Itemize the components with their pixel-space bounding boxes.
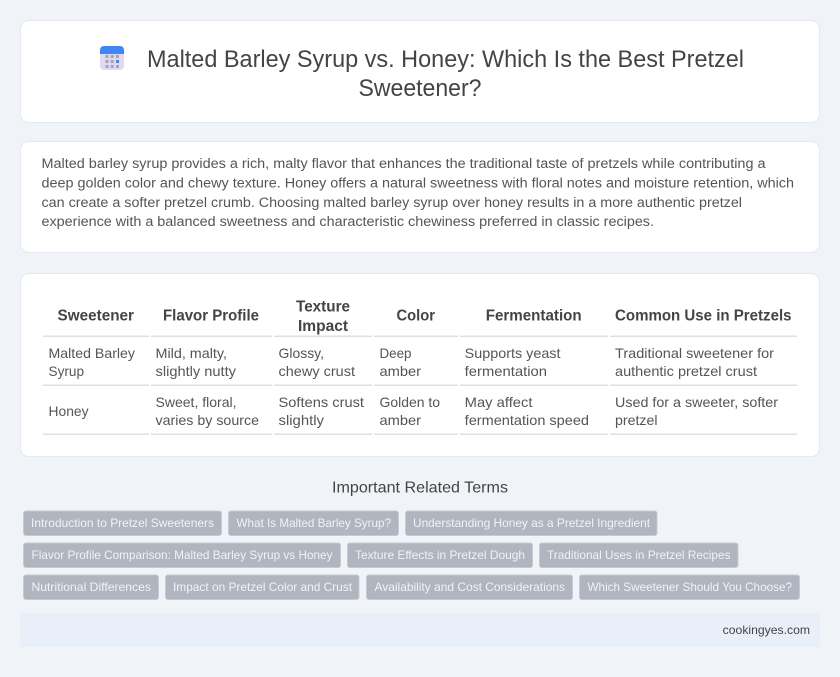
table row: honey: Softens crust bbox=[278, 394, 364, 410]
table header row: Common Use in Pretzels bbox=[615, 308, 792, 325]
table row: honey: May affect bbox=[465, 394, 533, 410]
table row: malted barley syrup: authentic pretzel crust bbox=[615, 363, 757, 379]
tag bbox=[24, 511, 222, 536]
table row: honey bbox=[48, 394, 778, 428]
table row: malted barley syrup: fermentation bbox=[465, 363, 547, 379]
table header row: Impact bbox=[298, 318, 348, 335]
table row: malted barley syrup: slightly nutty bbox=[156, 363, 236, 379]
description text: can create a softer pretzel crumb. Choosing malted barley syrup over honey results in a more authentic pretzel bbox=[42, 195, 742, 211]
title: Malted Barley Syrup vs. Honey: Which Is the Best Pretzel bbox=[147, 46, 744, 73]
table header row: Sweetener bbox=[58, 308, 134, 325]
tag: What Is Malted Barley Syrup? bbox=[236, 516, 391, 530]
table row: malted barley syrup: Syrup bbox=[48, 363, 84, 379]
tag bbox=[540, 543, 738, 568]
description text: deep golden color and chewy texture. Honey offers a natural sweetness with floral notes and moisture retention, which bbox=[42, 176, 794, 192]
title bbox=[147, 46, 744, 102]
table row: malted barley syrup: Supports yeast bbox=[465, 345, 561, 361]
panel: description card bbox=[20, 142, 820, 252]
icon: calendar bbox=[100, 46, 124, 70]
tag: Availability and Cost Considerations bbox=[374, 580, 565, 594]
panel: comparison table card bbox=[20, 274, 820, 456]
description text: experience with a balanced sweetness and characteristic chewiness preferred in classic recipes. bbox=[42, 214, 654, 230]
tag: Traditional Uses in Pretzel Recipes bbox=[547, 548, 730, 562]
table row: malted barley syrup: chewy crust bbox=[278, 363, 355, 379]
table header row: Texture bbox=[296, 299, 350, 316]
table row: honey: fermentation speed bbox=[465, 412, 589, 428]
description text: Malted barley syrup provides a rich, malty flavor that enhances the traditional taste of pretzels while contributing a bbox=[42, 156, 766, 172]
description text bbox=[42, 156, 794, 230]
tag bbox=[24, 575, 158, 600]
tag: Nutritional Differences bbox=[32, 580, 151, 594]
table row: malted barley syrup bbox=[48, 345, 774, 379]
table row: malted barley syrup: Traditional sweetener for bbox=[615, 345, 774, 361]
heading: important related terms: Important Related Terms bbox=[332, 480, 508, 497]
table row: honey: Honey bbox=[48, 403, 88, 419]
tag: Introduction to Pretzel Sweeteners bbox=[31, 516, 214, 530]
table row: honey: Sweet, floral, bbox=[156, 394, 236, 410]
table header row: Flavor Profile bbox=[163, 308, 259, 325]
table header row bbox=[58, 299, 792, 335]
tag: Understanding Honey as a Pretzel Ingredient bbox=[413, 516, 651, 530]
table row: honey: Used for a sweeter, softer bbox=[615, 394, 778, 410]
tag bbox=[348, 543, 532, 568]
panel: title card bbox=[20, 20, 820, 122]
tag bbox=[406, 511, 657, 536]
tag bbox=[24, 543, 340, 568]
tag bbox=[366, 575, 572, 600]
tag bbox=[580, 575, 800, 600]
table row: malted barley syrup: Glossy, bbox=[278, 345, 324, 361]
tag bbox=[166, 575, 359, 600]
tag list: related terms bbox=[24, 511, 800, 600]
table row: malted barley syrup: Mild, malty, bbox=[156, 345, 227, 361]
table row: malted barley syrup: Deep bbox=[380, 345, 412, 361]
tag: Texture Effects in Pretzel Dough bbox=[355, 548, 525, 562]
footer source text: cookingyes.com bbox=[723, 623, 810, 637]
tag: Impact on Pretzel Color and Crust bbox=[173, 580, 353, 594]
table row: malted barley syrup: Malted Barley bbox=[48, 345, 135, 361]
table row: honey: slightly bbox=[278, 412, 324, 428]
table header row: Fermentation bbox=[486, 308, 582, 325]
tag bbox=[228, 511, 398, 536]
tag: Which Sweetener Should You Choose? bbox=[588, 580, 792, 594]
table row: honey: Golden to bbox=[380, 394, 440, 410]
table row: honey: pretzel bbox=[615, 412, 658, 428]
table row: honey: amber bbox=[380, 412, 421, 428]
table row: malted barley syrup: amber bbox=[380, 363, 421, 379]
title: Sweetener? bbox=[358, 75, 482, 102]
footer bar bbox=[20, 613, 820, 647]
table row: honey: varies by source bbox=[156, 412, 259, 428]
tag: Flavor Profile Comparison: Malted Barley Syrup vs Honey bbox=[32, 548, 332, 562]
table header row: Color bbox=[396, 308, 435, 325]
